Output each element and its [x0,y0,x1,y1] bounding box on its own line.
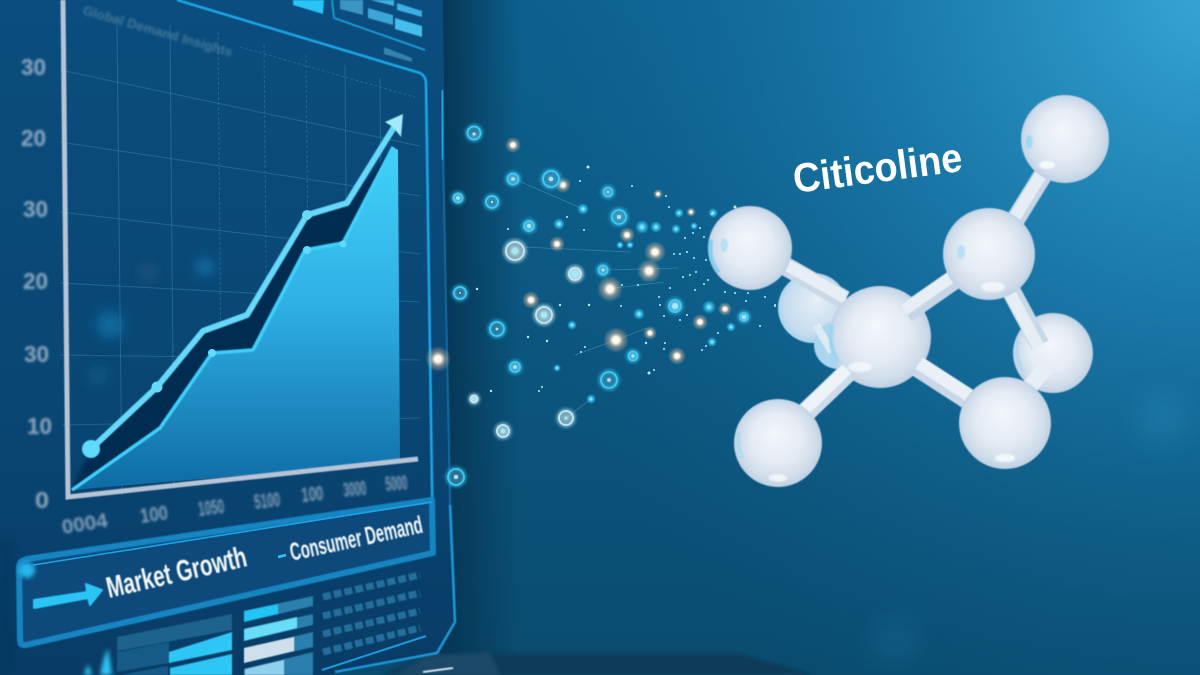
x axis labels: 100 [139,502,169,528]
table bottom line [322,636,426,670]
dark shadow beneath growth line [72,147,393,490]
x axis labels: 0004 [60,510,110,539]
sphere: top right [1021,95,1109,183]
y axis labels [21,54,52,513]
legend dash [278,555,286,557]
legend bar [19,500,433,645]
chart top and right frame [177,0,433,553]
x axis labels: 5000 [385,472,408,496]
top status tiles [293,0,425,62]
bond: top to upper [1010,170,1046,225]
bottom data table [323,575,420,652]
back sphere: behind left [778,273,848,343]
sphere: upper middle [943,208,1035,300]
laptop base under the dashboard [380,652,815,675]
chart grid [60,25,420,495]
connecting trails [519,181,678,418]
dashboard monitor panel [0,0,456,675]
sphere: centre [829,286,931,388]
y axis labels: 20 [23,268,48,294]
y axis labels: 30 [24,341,49,367]
line chart: market growth with arrow [82,114,403,458]
glowing cyan particles [553,203,736,404]
chart axes [63,0,418,497]
x axis labels: 3000 [342,478,367,502]
legend arrow [34,584,102,608]
y axis labels: 10 [27,413,52,439]
ring particles [448,126,748,485]
tiny particle dots [476,166,776,392]
y axis labels: 20 [21,125,46,151]
bond: centre to bottom right [917,363,987,410]
x axis labels: 1050 [197,496,225,521]
legend label: consumer demand: Consumer Demand [287,511,425,567]
legend box [19,500,433,645]
glowing warm particles [425,137,732,438]
blurred chart title: Global Demand Insights [81,2,234,60]
x axis labels: 5100 [253,489,281,514]
molecule model [708,95,1109,487]
faint chart bokeh [88,259,213,385]
area chart: consumer demand [72,147,400,490]
bond: bottom left to centre [801,369,849,415]
sphere: bottom right [959,377,1051,469]
x axis labels [60,472,408,539]
sphere: bottom left [734,399,822,487]
particle stream [425,126,776,485]
panel body [0,0,456,675]
legend label: market growth: Market Growth [103,540,250,605]
back sphere: under centre [814,321,862,369]
sphere: right [1013,313,1093,393]
bond: upper to centre [904,269,965,313]
bond: right to bottom right [1022,366,1047,396]
y axis labels: 30 [23,196,48,222]
panel outer glowing frame [335,90,455,672]
x axis labels: 100 [300,483,324,507]
sphere: left [708,206,846,300]
y axis labels: 30 [21,54,46,80]
bond: behind left down [816,325,832,352]
bond: upper to right [1006,285,1040,346]
y axis labels: 0 [35,487,49,513]
molecule label: Citicoline: Citicoline [790,134,965,202]
bottom dashboard bars [84,596,313,675]
